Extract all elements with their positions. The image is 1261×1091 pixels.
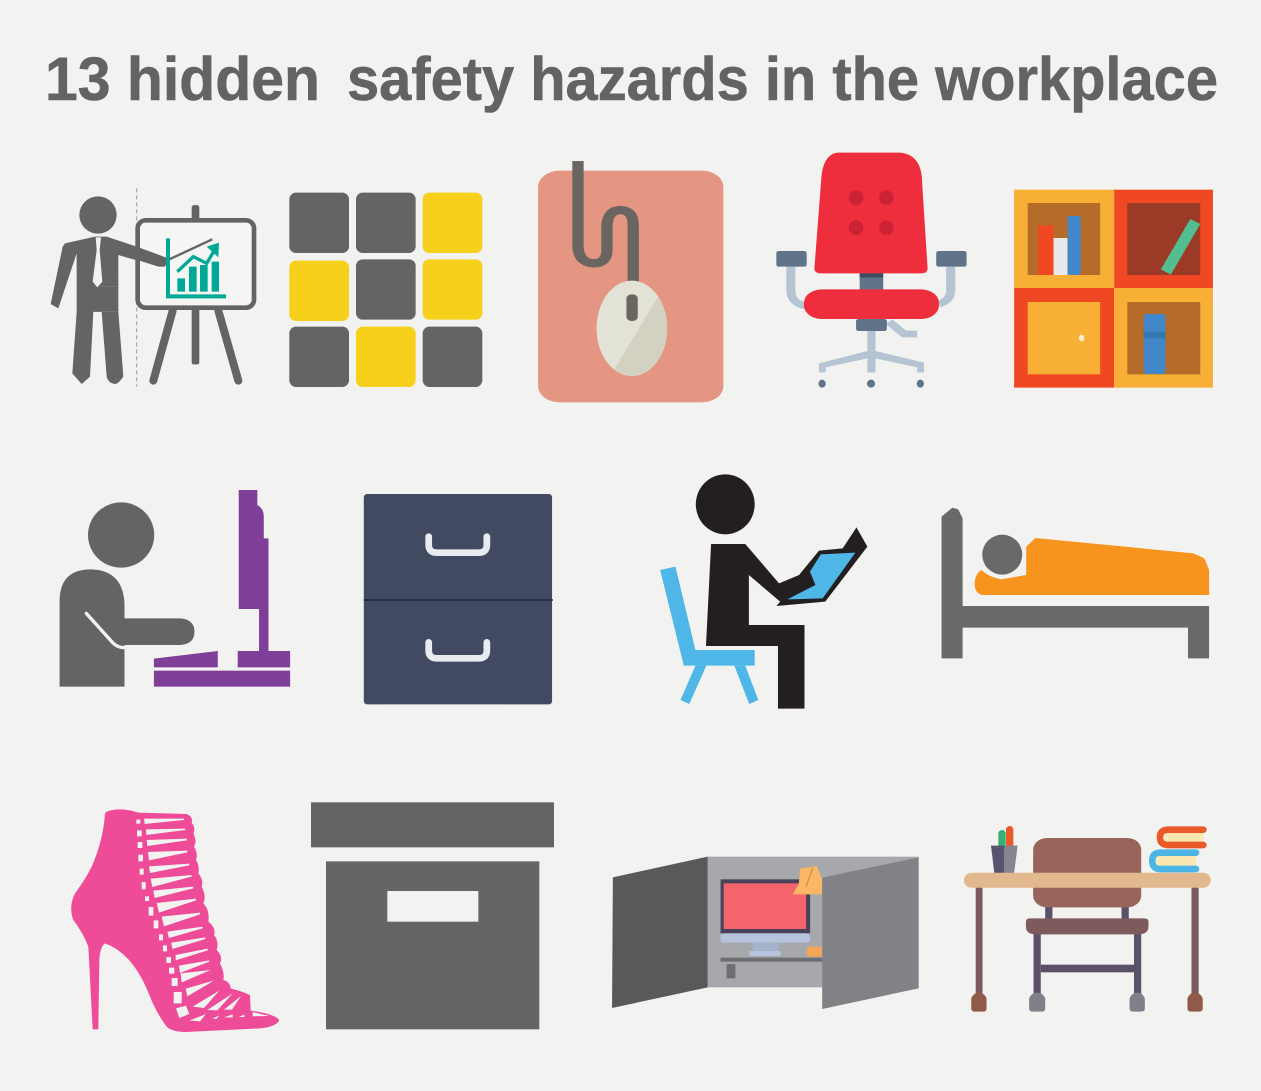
table top xyxy=(964,873,1211,888)
icon: bookshelf xyxy=(1014,190,1213,388)
icon: person in bed xyxy=(942,508,1209,658)
icon: presenter with easel xyxy=(51,188,254,387)
title: safety hazards in the workplace xyxy=(347,45,1218,113)
title: 13 hidden xyxy=(45,45,320,113)
pens, cup and books xyxy=(991,826,1203,873)
icon: mouse on pad xyxy=(538,161,723,402)
icon: storage box xyxy=(311,802,554,1029)
icon: person at computer xyxy=(60,490,290,687)
icon: pink high heel xyxy=(71,809,279,1032)
icon: office cubicle xyxy=(612,857,919,1009)
desk legs and chair xyxy=(971,838,1203,1012)
icon: person reading on chair xyxy=(660,474,867,709)
icon: filing cabinet xyxy=(364,494,553,704)
icon: desk and chair xyxy=(964,826,1211,1012)
icon: grid of tiles xyxy=(289,193,482,387)
icon: red office chair xyxy=(776,153,967,388)
